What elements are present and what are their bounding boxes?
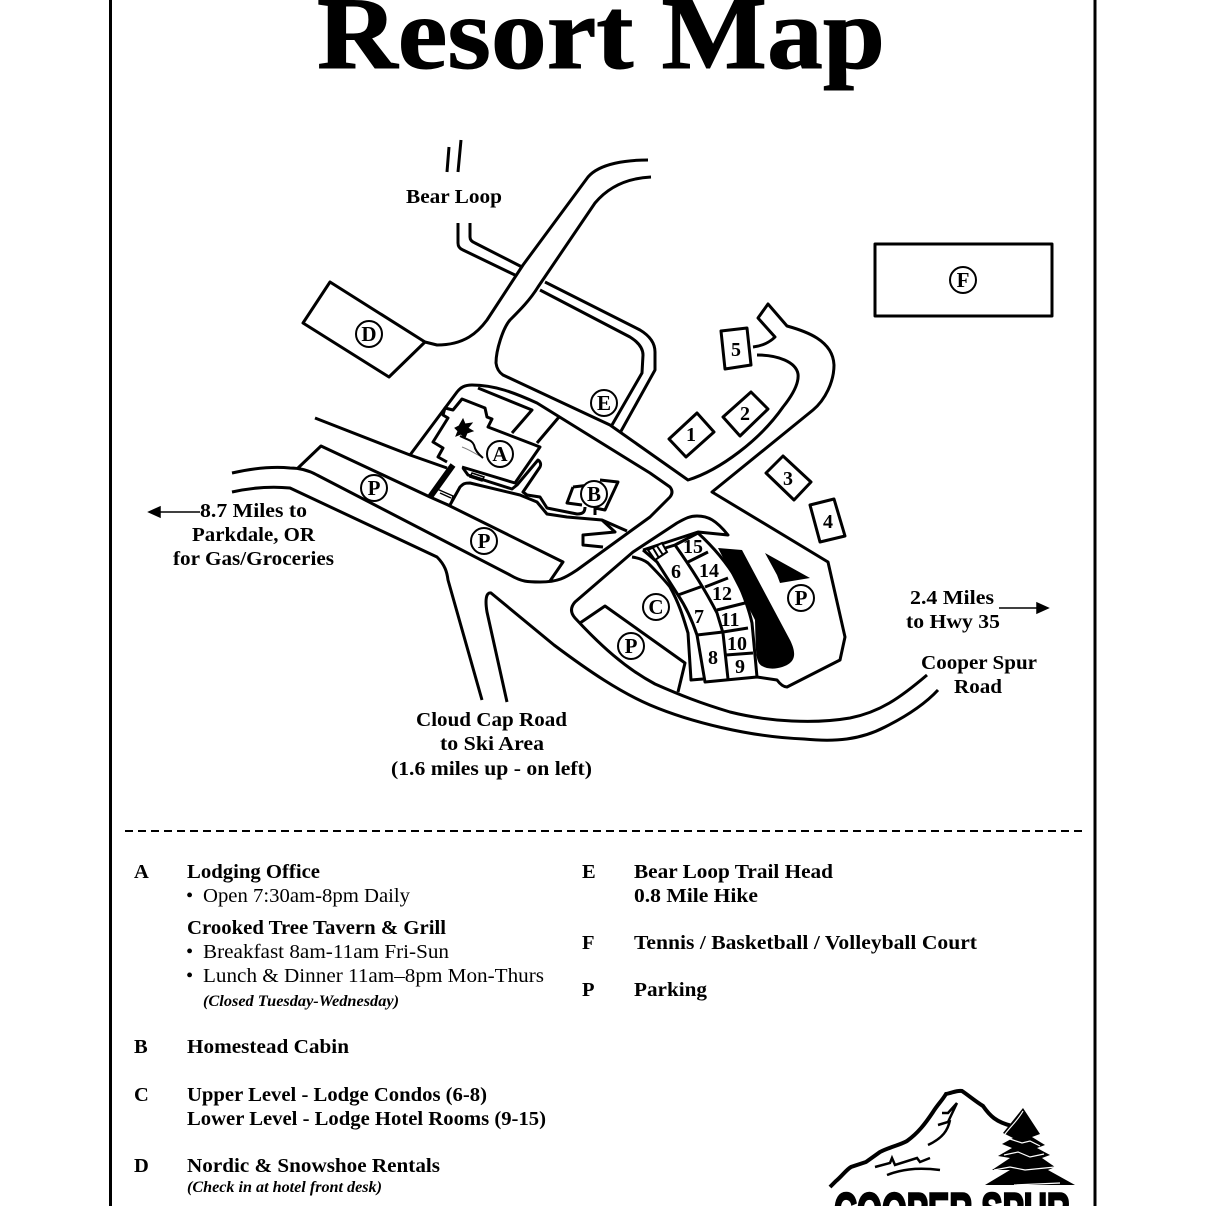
entry A: Breakfast 8am-11am Fri-Sun — [203, 941, 449, 963]
entry F: Tennis / Basketball / Volleyball Court — [634, 932, 977, 954]
label: Hwy 35 direction: 2.4 Miles — [910, 587, 994, 609]
label: Cloud Cap Road: (1.6 miles up - on left) — [391, 758, 592, 780]
marker P right — [788, 585, 814, 611]
logo: Cooper Spur — [830, 1091, 1075, 1206]
marker P lower — [618, 633, 644, 659]
label: Cloud Cap Road: Cloud Cap Road — [416, 709, 568, 731]
building numbers: 15 — [683, 536, 703, 558]
entry C: Lower Level - Lodge Hotel Rooms (9-15) — [187, 1108, 546, 1130]
parking lot upper left — [298, 446, 563, 581]
building numbers: 10 — [727, 633, 747, 655]
label: Parkdale direction: for Gas/Groceries — [173, 548, 334, 570]
label: Cloud Cap Road: to Ski Area — [440, 733, 544, 755]
label: Cooper Spur Road: Cooper Spur — [921, 652, 1037, 674]
building numbers: 11 — [721, 609, 739, 631]
condo and hotel room blocks — [662, 533, 757, 679]
logo mountain — [830, 1091, 1012, 1187]
building numbers: 5 — [731, 339, 741, 361]
entry D: D — [134, 1155, 149, 1177]
entry D: Nordic & Snowshoe Rentals — [187, 1155, 440, 1177]
entry C: C — [134, 1084, 149, 1106]
entry D: (Check in at hotel front desk) — [187, 1179, 382, 1196]
homestead cabin B — [567, 480, 618, 515]
marker A — [487, 441, 513, 467]
building numbers: 4 — [823, 511, 833, 533]
marker P middle: P — [478, 529, 491, 553]
entry F: F — [582, 932, 595, 954]
building numbers: 14 — [699, 560, 719, 582]
entry E: Bear Loop Trail Head — [634, 861, 834, 883]
black triangle area — [765, 553, 810, 583]
legend: left column — [134, 861, 546, 1196]
entry E — [582, 861, 834, 907]
arrow: to Hwy 35 — [999, 603, 1048, 613]
logo pine tree — [985, 1108, 1075, 1185]
entry B: Homestead Cabin — [187, 1036, 350, 1058]
buildings and parking lots — [298, 244, 1052, 692]
entry A: • — [186, 885, 193, 907]
entry E: 0.8 Mile Hike — [634, 885, 758, 907]
building numbers: 7 — [694, 606, 704, 628]
entry A: • — [186, 965, 193, 987]
marker B — [581, 481, 607, 507]
marker P middle — [471, 528, 497, 554]
marker E — [591, 390, 617, 416]
building: lodging office A — [433, 399, 540, 483]
building numbers: 9 — [735, 656, 745, 678]
label: Parkdale direction: 8.7 Miles to — [200, 500, 307, 522]
entry A: A — [134, 861, 149, 883]
entry E: E — [582, 861, 596, 883]
entry B: B — [134, 1036, 148, 1058]
building 3 — [766, 456, 811, 500]
building 2 — [723, 392, 768, 436]
building numbers: 6 — [671, 561, 681, 583]
entry A: Crooked Tree Tavern & Grill — [187, 917, 446, 939]
label: Cooper Spur Road — [921, 652, 1037, 698]
building numbers: 2 — [740, 403, 750, 425]
small hatch details — [432, 473, 484, 505]
entry C: Upper Level - Lodge Condos (6-8) — [187, 1084, 487, 1106]
entry A: (Closed Tuesday-Wednesday) — [203, 993, 399, 1010]
label: Hwy 35 direction: to Hwy 35 — [906, 611, 1000, 633]
building 1 — [669, 413, 714, 457]
entry A: • — [186, 941, 193, 963]
building numbers: 8 — [708, 647, 718, 669]
entry A: Open 7:30am-8pm Daily — [203, 885, 411, 907]
marker C: C — [648, 595, 664, 619]
marker D: D — [361, 322, 377, 346]
resort map — [149, 140, 1052, 780]
building numbers: 12 — [712, 583, 732, 605]
black parking area — [718, 548, 794, 669]
marker F — [950, 267, 976, 293]
lower parking lot — [580, 606, 685, 692]
marker C — [643, 594, 669, 620]
building numbers: 3 — [783, 468, 793, 490]
entry C — [134, 1084, 546, 1130]
entry A: Lodging Office — [187, 861, 320, 883]
marker D — [356, 321, 382, 347]
arrow: to Parkdale — [149, 507, 200, 517]
entry P: P — [582, 979, 595, 1001]
building D — [303, 282, 425, 377]
marker P upper left: P — [368, 476, 381, 500]
building 5 — [721, 328, 751, 369]
marker B: B — [587, 482, 601, 506]
label: Cloud Cap Road — [391, 709, 592, 780]
court F — [875, 244, 1052, 316]
marker F: F — [957, 268, 969, 292]
label: Parkdale direction — [173, 500, 334, 570]
label: Hwy 35 direction — [906, 587, 1000, 633]
roads — [232, 140, 938, 740]
marker P upper left — [361, 475, 387, 501]
label: Bear Loop: Bear Loop — [406, 186, 502, 208]
icon: crooked tree — [455, 419, 483, 458]
marker P lower: P — [625, 634, 638, 658]
entry D — [134, 1155, 440, 1196]
label: Cooper Spur Road: Road — [954, 676, 1003, 698]
entry P: Parking — [634, 979, 708, 1001]
small stair block — [648, 543, 667, 560]
marker P right: P — [795, 586, 808, 610]
entry A: Lunch & Dinner 11am–8pm Mon-Thurs — [203, 965, 544, 987]
building numbers: 1 — [686, 424, 696, 446]
black stair — [430, 465, 453, 497]
label: Parkdale direction: Parkdale, OR — [192, 524, 315, 546]
legend: right column — [582, 861, 977, 1001]
marker A: A — [492, 442, 508, 466]
building numbers — [671, 339, 833, 678]
entry P — [582, 979, 708, 1001]
entry A — [134, 861, 544, 1010]
marker E: E — [597, 391, 611, 415]
logo mountain snow strokes — [875, 1103, 957, 1175]
location markers — [356, 267, 976, 659]
building 4 — [810, 499, 845, 542]
